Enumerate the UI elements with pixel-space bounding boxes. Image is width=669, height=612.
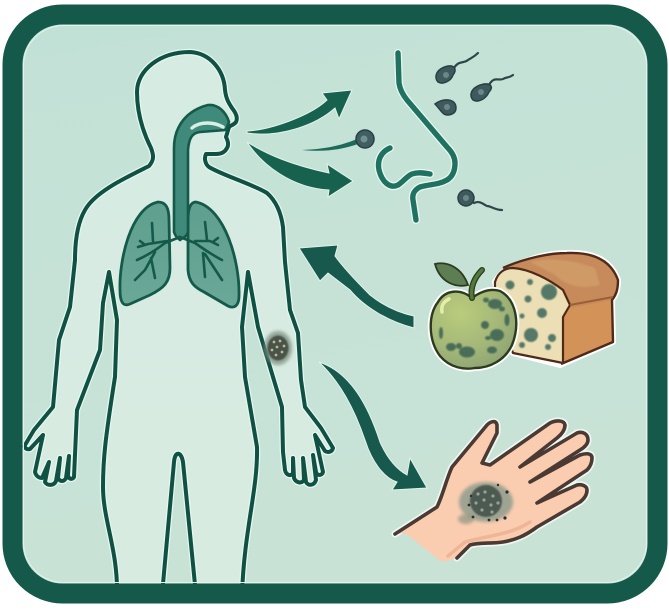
airway trachea and nasal passage — [174, 105, 229, 240]
human body outline — [25, 52, 333, 595]
apple — [431, 263, 516, 369]
bread — [495, 253, 618, 365]
arrow: food to body — [299, 245, 414, 328]
lungs — [120, 202, 239, 307]
nose — [378, 53, 455, 220]
arrow: exhaled air to nose lower — [247, 142, 353, 197]
spore in flight — [302, 130, 374, 151]
arrow: exhaled air to nose upper — [247, 90, 352, 134]
bronchi — [135, 222, 222, 280]
hand — [395, 421, 592, 562]
arm mold patch — [264, 331, 292, 365]
spores — [435, 53, 513, 210]
arrow: body to hand — [319, 362, 427, 490]
